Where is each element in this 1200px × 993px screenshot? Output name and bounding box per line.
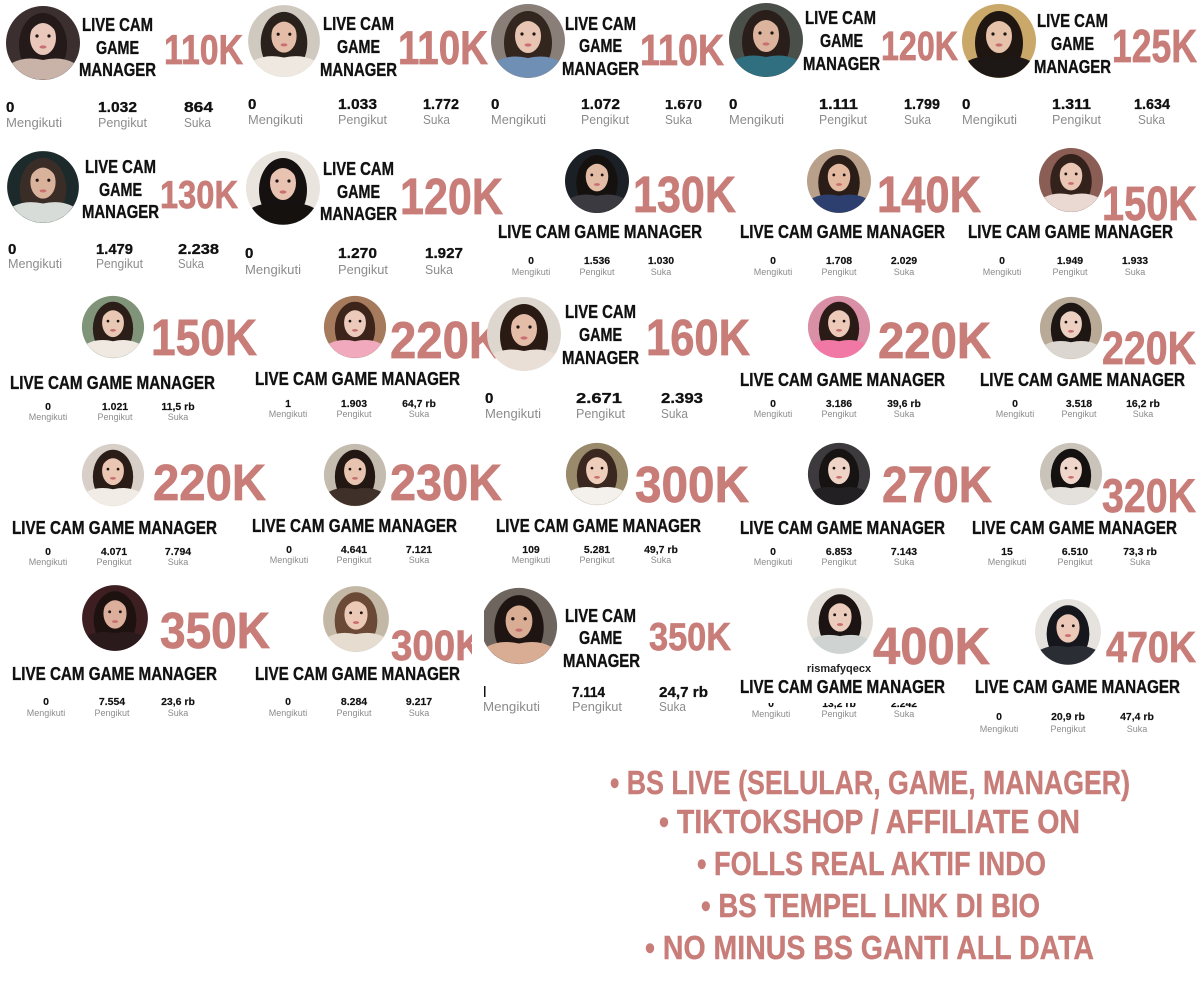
stats: 1.799 xyxy=(904,96,940,113)
stats xyxy=(29,546,191,567)
card 23: 350K xyxy=(472,586,731,714)
bullet 2: • TIKTOKSHOP / AFFILIATE ON xyxy=(659,803,1080,840)
title xyxy=(82,157,159,222)
title: LIVE CAM GAME MANAGER xyxy=(255,369,460,389)
price: 140K xyxy=(877,166,981,223)
stats: 1.111 xyxy=(819,96,858,113)
card 21: 350K xyxy=(12,585,270,718)
stats xyxy=(512,255,674,277)
price: 110K xyxy=(640,26,724,75)
stats: Mengikuti xyxy=(483,700,540,714)
stats: Pengikut xyxy=(579,267,615,277)
stats: 0 xyxy=(491,96,499,113)
feature list xyxy=(610,764,1130,966)
price: 160K xyxy=(646,309,750,366)
title: LIVE CAM GAME MANAGER xyxy=(498,222,702,242)
stats: 1.927 xyxy=(425,245,463,262)
avatar xyxy=(7,151,79,223)
stats: 0 xyxy=(770,255,776,267)
stats: Pengikut xyxy=(821,557,857,567)
stats: 49,7 rb xyxy=(644,544,678,556)
stats: 1.479 xyxy=(96,241,133,258)
stats xyxy=(512,544,678,565)
stats xyxy=(6,99,214,130)
stats: 64,7 rb xyxy=(402,398,436,410)
stats: Pengikut xyxy=(96,557,132,567)
stats: 6.510 xyxy=(1062,546,1088,558)
card 6: 130K xyxy=(7,151,238,271)
stats: 0 xyxy=(8,241,16,258)
stats: Mengikuti xyxy=(983,267,1021,277)
title: LIVE CAM GAME MANAGER xyxy=(12,664,217,684)
stats xyxy=(245,245,463,277)
title: GAME xyxy=(337,182,380,202)
title: LIVE CAM GAME MANAGER xyxy=(740,518,945,538)
title: LIVE CAM GAME MANAGER xyxy=(252,516,457,536)
avatar xyxy=(962,4,1036,78)
title: MANAGER xyxy=(562,348,639,368)
bullet 4: • BS TEMPEL LINK DI BIO xyxy=(701,887,1040,924)
price: 110K xyxy=(398,21,488,74)
stats: Pengikut xyxy=(94,708,130,718)
card 24: 400K xyxy=(740,588,990,719)
title: LIVE CAM xyxy=(565,302,636,322)
avatar xyxy=(808,443,870,505)
stats: Mengikuti xyxy=(29,557,67,567)
title: GAME xyxy=(1051,34,1094,54)
stats: Mengikuti xyxy=(8,257,62,271)
price: 400K xyxy=(873,618,990,676)
stats: 0 xyxy=(45,401,51,413)
stats: 864 xyxy=(184,99,214,116)
stats (partly covered): Pengikut xyxy=(821,709,857,719)
stats xyxy=(483,684,708,714)
stats: 0 xyxy=(770,398,776,410)
bullet 5: • NO MINUS BS GANTI ALL DATA xyxy=(645,929,1094,966)
stats: Mengikuti xyxy=(980,724,1018,734)
stats: Pengikut xyxy=(1057,557,1093,567)
stats: Suka xyxy=(904,113,931,127)
stats xyxy=(269,696,432,718)
avatar xyxy=(324,444,386,506)
stats: Mengikuti xyxy=(485,407,541,421)
price: 130K xyxy=(160,174,238,217)
stats (partly covered) xyxy=(740,694,945,719)
avatar xyxy=(82,444,144,506)
title: LIVE CAM xyxy=(323,14,394,34)
price: 230K xyxy=(390,454,502,511)
stats: 0 xyxy=(43,696,49,708)
avatar xyxy=(324,296,386,358)
stats: Pengikut xyxy=(336,708,372,718)
stats: Suka xyxy=(661,407,688,421)
stats xyxy=(485,390,703,421)
price: 220K xyxy=(153,454,266,511)
card 15: 220K xyxy=(980,297,1196,419)
stats xyxy=(29,401,195,422)
avatar xyxy=(729,3,803,77)
stats: Pengikut xyxy=(97,412,133,422)
stats xyxy=(27,696,195,718)
title: MANAGER xyxy=(562,59,639,79)
stats: Pengikut xyxy=(96,257,143,271)
stats: Pengikut xyxy=(336,555,372,565)
price: 270K xyxy=(882,456,992,513)
stats: Pengikut xyxy=(581,113,630,127)
stats: Pengikut xyxy=(1052,267,1088,277)
card 10: 150K xyxy=(968,148,1197,277)
title: MANAGER xyxy=(803,54,880,74)
stats: Pengikut xyxy=(572,700,623,714)
stats: Suka xyxy=(1138,113,1165,127)
title xyxy=(562,302,639,368)
avatar xyxy=(248,5,320,77)
card 25: 470K xyxy=(975,599,1196,734)
avatar xyxy=(1040,443,1102,505)
title: LIVE CAM xyxy=(565,606,636,626)
avatar xyxy=(1035,599,1101,665)
stats: Suka xyxy=(409,555,429,565)
stats: 1.030 xyxy=(648,255,674,267)
stats: Pengikut xyxy=(819,113,868,127)
title: GAME xyxy=(99,180,142,200)
stats: 7.554 xyxy=(99,696,125,708)
stats: Suka xyxy=(894,557,914,567)
title: MANAGER xyxy=(320,204,397,224)
stats: Suka xyxy=(409,708,429,718)
stats: 4.641 xyxy=(341,544,367,556)
stats: Suka xyxy=(894,267,914,277)
title: MANAGER xyxy=(563,651,640,671)
card 22: 300K xyxy=(255,586,483,718)
card 17: 230K xyxy=(252,444,502,565)
title xyxy=(320,14,397,80)
stats: Pengikut xyxy=(1052,113,1102,127)
card 1: 110K xyxy=(6,6,243,130)
stats: 1.311 xyxy=(1052,96,1091,113)
avatar xyxy=(323,586,389,652)
stats xyxy=(269,398,436,419)
card 14: 220K xyxy=(740,296,991,419)
price: 350K xyxy=(649,616,731,659)
avatar xyxy=(808,296,870,358)
stats: Mengikuti xyxy=(245,263,301,277)
card 16: 220K xyxy=(12,444,266,567)
stats: Suka xyxy=(178,257,204,271)
stats: Pengikut xyxy=(576,407,626,421)
stats: Mengikuti xyxy=(754,557,792,567)
stats: 0 xyxy=(45,546,51,558)
title: MANAGER xyxy=(1034,57,1111,77)
avatar xyxy=(1040,297,1102,359)
stats: Suka xyxy=(665,113,692,127)
stats: 1.536 xyxy=(584,255,610,267)
stats: Mengikuti xyxy=(512,267,550,277)
stats: 1.021 xyxy=(102,401,128,413)
stats: Suka xyxy=(651,555,671,565)
stats: 0 xyxy=(996,711,1002,723)
card 18: 300K xyxy=(496,443,749,565)
stats: 1.033 xyxy=(338,96,377,113)
title: MANAGER xyxy=(320,60,397,80)
stats: 3.186 xyxy=(826,398,852,410)
title: LIVE CAM GAME MANAGER xyxy=(740,677,945,697)
stats: 1.903 xyxy=(341,398,367,410)
title xyxy=(562,14,639,79)
title: LIVE CAM GAME MANAGER xyxy=(255,664,460,684)
price: 300K xyxy=(391,622,483,670)
stats: Pengikut xyxy=(98,116,148,130)
stats: Mengikuti xyxy=(248,113,303,127)
title xyxy=(803,8,880,74)
stats: 0 xyxy=(1012,398,1018,410)
stats: 7.114 xyxy=(572,684,606,701)
stats: Suka xyxy=(168,412,188,422)
stats: 1 xyxy=(285,398,291,410)
card 13: 160K xyxy=(485,297,750,421)
stats xyxy=(983,255,1148,277)
card 20: 320K xyxy=(972,443,1196,567)
stats xyxy=(8,241,219,271)
title: LIVE CAM xyxy=(323,159,394,179)
card 5: 125K xyxy=(962,4,1197,127)
stats: 0 xyxy=(729,96,737,113)
price: 220K xyxy=(878,312,991,369)
stats: 7.143 xyxy=(891,546,917,558)
price: 130K xyxy=(633,166,736,223)
stats: Mengikuti xyxy=(988,557,1026,567)
stats: 23,6 rb xyxy=(161,696,195,708)
stats xyxy=(754,398,921,419)
stats: 24,7 rb xyxy=(659,684,708,701)
stats: 7.121 xyxy=(406,544,432,556)
stats: Suka xyxy=(894,409,914,419)
avatar xyxy=(807,149,871,213)
stats: 0 xyxy=(245,245,253,262)
stats: Mengikuti xyxy=(729,113,784,127)
stats (partly covered): 2.242 xyxy=(891,698,917,710)
card 7: 120K xyxy=(245,151,503,277)
stats: Suka xyxy=(651,267,671,277)
stats: Mengikuti xyxy=(996,409,1034,419)
price: 300K xyxy=(635,456,749,513)
stats: Mengikuti xyxy=(6,116,62,130)
card 8: 130K xyxy=(498,149,736,277)
price: 220K xyxy=(390,312,503,370)
stats: 1.032 xyxy=(98,99,137,116)
stats xyxy=(270,544,432,565)
title: LIVE CAM xyxy=(565,14,636,34)
title: LIVE CAM GAME MANAGER xyxy=(740,370,945,390)
stats: Pengikut xyxy=(1061,409,1097,419)
stats: Suka xyxy=(1127,724,1147,734)
stats: 2.671 xyxy=(576,390,622,407)
avatar xyxy=(1039,148,1103,212)
stats: Suka xyxy=(1125,267,1145,277)
card 9: 140K xyxy=(740,149,981,277)
stats: Suka xyxy=(184,116,211,130)
title: GAME xyxy=(820,31,863,51)
title: GAME xyxy=(579,36,622,56)
avatar xyxy=(565,149,629,213)
stats: 8.284 xyxy=(341,696,367,708)
stats: Mengikuti xyxy=(962,113,1017,127)
stats: 11,5 rb xyxy=(161,401,195,413)
title xyxy=(320,159,397,224)
stats: Mengikuti xyxy=(491,113,546,127)
stats: 0 xyxy=(962,96,970,113)
title: LIVE CAM xyxy=(85,157,156,177)
avatar xyxy=(246,151,320,225)
stats: 15 xyxy=(1001,546,1013,558)
stats: Pengikut xyxy=(338,263,389,277)
avatar xyxy=(82,296,144,358)
stats (partly covered): 0 xyxy=(768,698,774,710)
title: GAME xyxy=(96,38,139,58)
price: 150K xyxy=(151,309,257,366)
stats xyxy=(962,96,1171,127)
title: LIVE CAM GAME MANAGER xyxy=(10,373,215,393)
stats: Mengikuti xyxy=(27,708,65,718)
title xyxy=(563,606,640,671)
stats: 0 xyxy=(286,544,292,556)
stats: 1.634 xyxy=(1134,96,1171,113)
stats: Pengikut xyxy=(336,409,372,419)
avatar xyxy=(6,6,80,80)
price: 120K xyxy=(881,23,958,69)
bullet 3: • FOLLS REAL AKTIF INDO xyxy=(697,845,1046,882)
stats: Pengikut xyxy=(1050,724,1086,734)
price: 110K xyxy=(164,26,243,73)
avatar xyxy=(566,443,628,505)
stats: 3.518 xyxy=(1066,398,1092,410)
title: MANAGER xyxy=(79,60,156,80)
stats: 9.217 xyxy=(406,696,432,708)
title: GAME xyxy=(337,37,380,57)
stats: 1.072 xyxy=(581,96,620,113)
stats xyxy=(980,711,1154,734)
stats: Suka xyxy=(423,113,450,127)
title: MANAGER xyxy=(82,202,159,222)
stats: 7.794 xyxy=(165,546,191,558)
stats: 0 xyxy=(999,255,1005,267)
stats: 2.029 xyxy=(891,255,917,267)
avatar xyxy=(82,585,148,651)
title: LIVE CAM xyxy=(82,15,153,35)
stats: 47,4 rb xyxy=(1120,711,1154,723)
stats: 20,9 rb xyxy=(1051,711,1085,723)
avatar xyxy=(807,588,873,654)
stats: 1.708 xyxy=(826,255,852,267)
title: LIVE CAM xyxy=(1037,11,1108,31)
stats: Pengikut xyxy=(579,555,615,565)
title: GAME xyxy=(579,325,622,345)
stats: 1.670 xyxy=(665,96,702,113)
title xyxy=(79,15,156,80)
stats: Pengikut xyxy=(821,267,857,277)
stats: 0 xyxy=(6,99,14,116)
card 19: 270K xyxy=(740,443,992,567)
stats xyxy=(988,546,1157,567)
stats xyxy=(491,95,706,127)
avatar xyxy=(487,297,561,371)
stats: Suka xyxy=(1130,557,1150,567)
stats: Mengikuti xyxy=(269,409,307,419)
stats xyxy=(754,546,917,567)
stats (partly covered): Mengikuti xyxy=(752,709,790,719)
title: GAME xyxy=(579,628,622,648)
card 3: 110K xyxy=(491,4,724,127)
stats: Suka xyxy=(168,557,188,567)
stats: 2.238 xyxy=(178,241,219,258)
stats: Suka xyxy=(409,409,429,419)
stats (partly covered): 13,2 rb xyxy=(822,698,856,710)
title: LIVE CAM GAME MANAGER xyxy=(740,222,945,242)
stats: 0 xyxy=(770,546,776,558)
stats: 0 xyxy=(485,390,493,407)
stats: Mengikuti xyxy=(754,409,792,419)
stats: 6.853 xyxy=(826,546,852,558)
stats: Suka xyxy=(659,700,686,714)
card 11: 150K xyxy=(10,296,257,422)
stats: Mengikuti xyxy=(512,555,550,565)
stats: 73,3 rb xyxy=(1123,546,1157,558)
stats: 0 xyxy=(285,696,291,708)
card 12: 220K xyxy=(255,296,503,419)
price: 120K xyxy=(400,168,503,225)
avatar xyxy=(491,4,565,78)
stats: Suka xyxy=(425,263,453,277)
stats xyxy=(729,96,940,127)
stats: 1.772 xyxy=(423,96,459,113)
price: 350K xyxy=(160,602,270,659)
stats: 5.281 xyxy=(584,544,610,556)
stats xyxy=(248,96,459,127)
stats: 1.933 xyxy=(1122,255,1148,267)
stats: Pengikut xyxy=(821,409,857,419)
stats xyxy=(754,255,917,277)
stats: Suka xyxy=(168,708,188,718)
title xyxy=(1034,11,1111,77)
stats: Pengikut xyxy=(338,113,388,127)
username: rismafyqecx xyxy=(807,663,872,675)
stats: 109 xyxy=(522,544,540,556)
stats: 2.393 xyxy=(661,390,703,407)
stats: Mengikuti xyxy=(270,555,308,565)
avatar xyxy=(481,588,557,664)
card 2: 110K xyxy=(248,5,488,127)
stats: 0 xyxy=(248,96,256,113)
stats: 16,2 rb xyxy=(1126,398,1160,410)
stats: Mengikuti xyxy=(754,267,792,277)
stats: 0 xyxy=(528,255,534,267)
stats: Mengikuti xyxy=(29,412,67,422)
stats: 1.270 xyxy=(338,245,377,262)
stats: Mengikuti xyxy=(269,708,307,718)
card 4: 120K xyxy=(729,3,958,127)
stats: 1.949 xyxy=(1057,255,1083,267)
title: LIVE CAM GAME MANAGER xyxy=(496,516,701,536)
stats (partly covered): Suka xyxy=(894,709,914,719)
stats xyxy=(996,398,1160,419)
title: LIVE CAM xyxy=(805,8,876,28)
title: LIVE CAM GAME MANAGER xyxy=(12,518,217,538)
stats: 39,6 rb xyxy=(887,398,921,410)
stats: Suka xyxy=(1133,409,1153,419)
stats: 4.071 xyxy=(101,546,127,558)
